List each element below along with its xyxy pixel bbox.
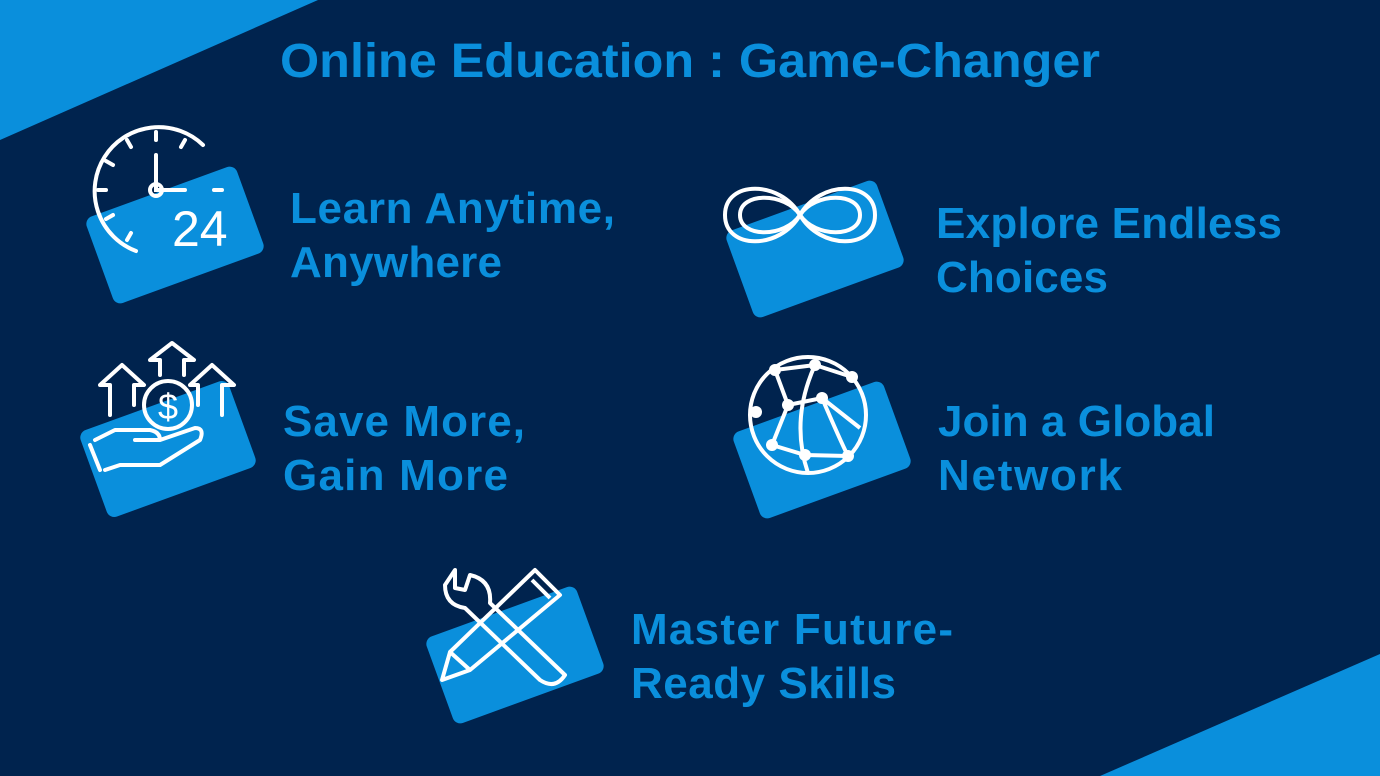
item: global network	[731, 357, 1215, 521]
title: Online Education : Game-Changer	[280, 35, 1100, 88]
text: global: Join a Global	[938, 397, 1215, 446]
icon: money hand	[78, 343, 258, 519]
icon: clock 24	[84, 127, 266, 306]
item: explore choices	[724, 178, 1282, 320]
icon: globe network	[731, 357, 913, 521]
item: learn anytime	[84, 127, 615, 306]
text: save: Gain More	[283, 451, 508, 500]
item: future skills	[424, 570, 953, 726]
text: master: Master Future-	[631, 605, 953, 654]
icon: clock 24: 24	[172, 201, 228, 257]
text: save: Save More,	[283, 397, 525, 446]
icon: money hand: $	[158, 386, 178, 427]
text: explore: Choices	[936, 253, 1108, 302]
text: learn anytime: Anywhere	[290, 238, 502, 287]
text: learn anytime: Learn Anytime,	[290, 184, 615, 233]
text: master: Ready Skills	[631, 659, 896, 708]
icon: wrench pencil	[424, 570, 606, 726]
text: explore: Explore Endless	[936, 199, 1282, 248]
item: save more	[78, 343, 525, 519]
icon: infinity	[724, 178, 906, 320]
text: global: Network	[938, 451, 1123, 500]
